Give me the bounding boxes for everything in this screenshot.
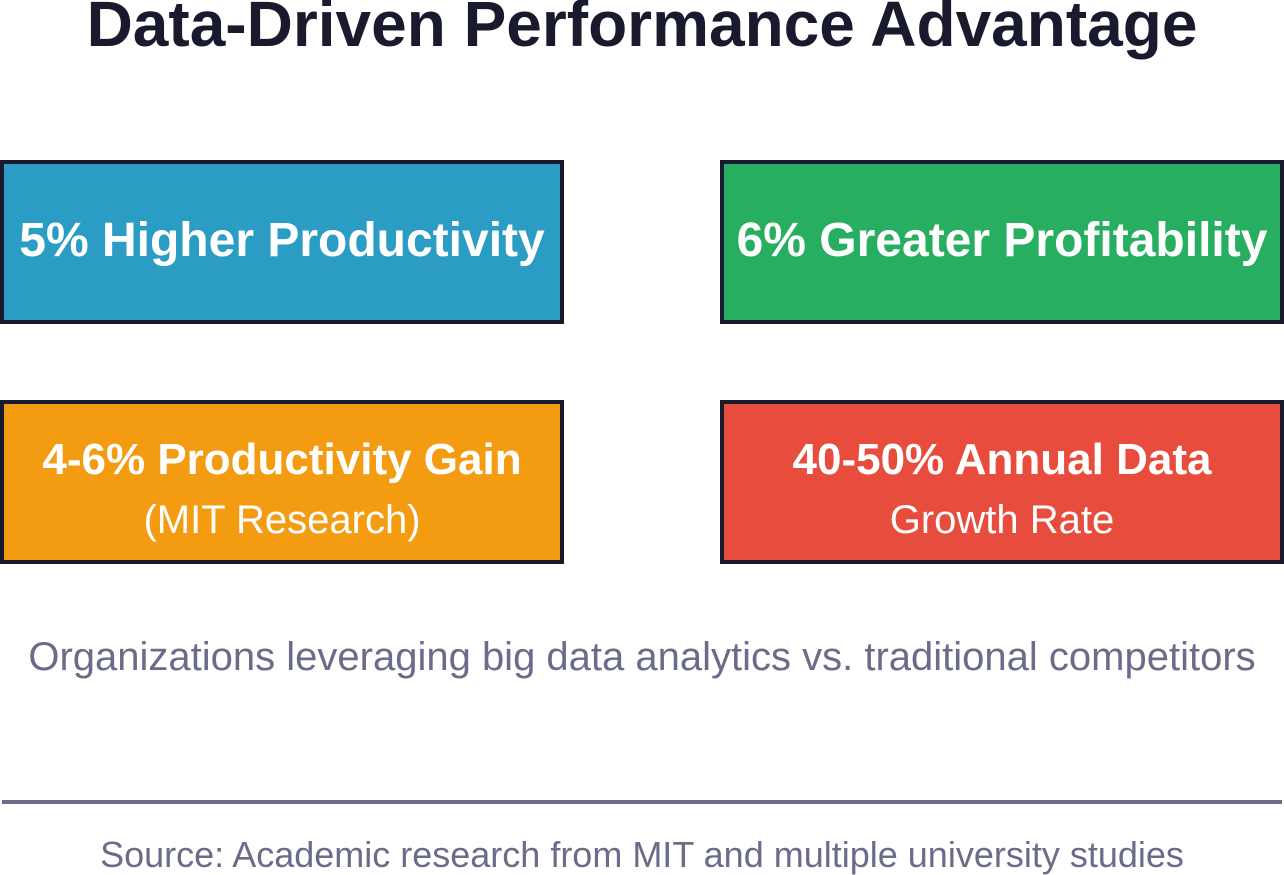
panel: profitability: [722, 162, 1282, 322]
subtitle: Organizations leveraging big data analytics vs. traditional competitors: [28, 635, 1256, 679]
panel: MIT productivity gain: (MIT Research): [143, 498, 421, 542]
panel: productivity: [2, 162, 562, 322]
panel: data growth: 40-50% Annual Data: [793, 435, 1212, 484]
panel: data growth: Growth Rate: [890, 498, 1114, 542]
panel: profitability: 6% Greater Profitability: [737, 214, 1268, 267]
panel: productivity: 5% Higher Productivity: [19, 214, 545, 267]
panel: data growth: [722, 402, 1282, 562]
panel: MIT productivity gain: 4-6% Productivity Gain: [42, 435, 522, 484]
panel: MIT productivity gain: [2, 402, 562, 562]
source note: Source: Academic research from MIT and multiple university studies: [100, 834, 1184, 875]
